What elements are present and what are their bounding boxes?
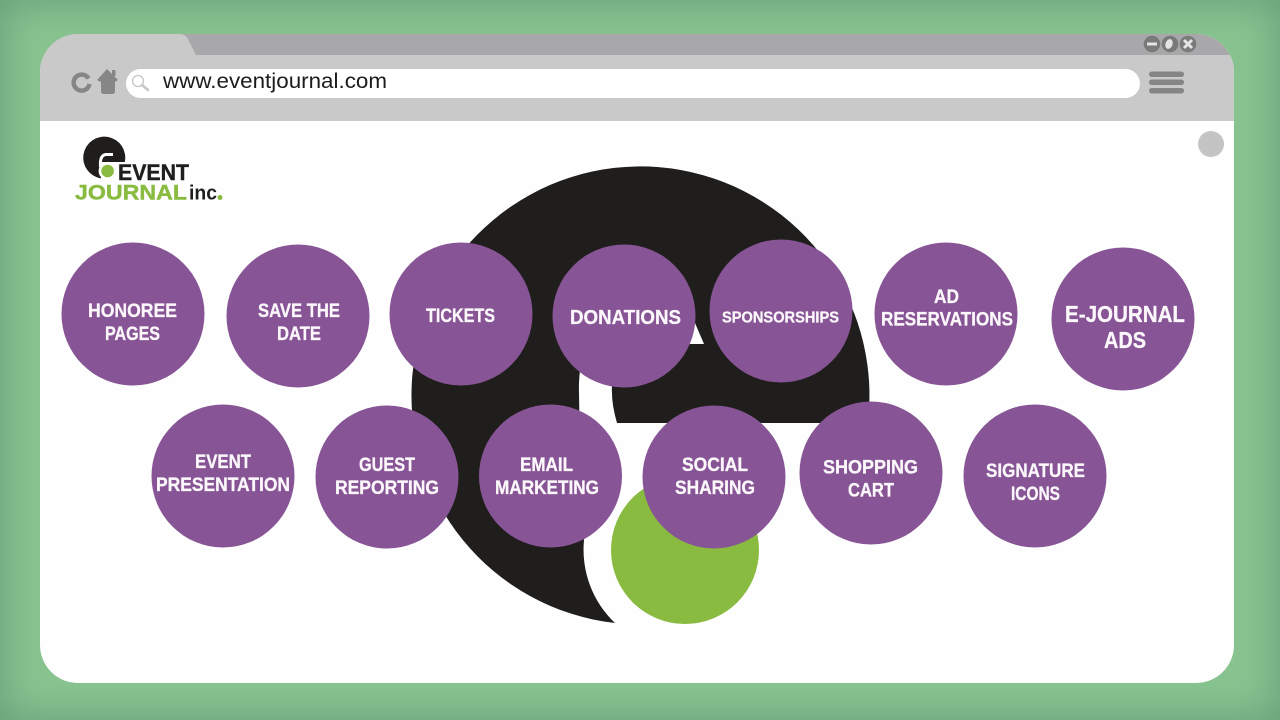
feature circle: sponsorships: SPONSORSHIPS: [722, 310, 839, 326]
logo mark: [83, 137, 125, 180]
feature circle: event presentation: [152, 404, 294, 548]
feature circle: ad reservations: RESERVATIONS: [881, 310, 1013, 330]
icon: menu: [1149, 72, 1184, 94]
address bar: [126, 69, 1140, 98]
feature circle: guest reporting: GUEST: [359, 455, 415, 476]
feature circle: signature icons: SIGNATURE: [986, 461, 1085, 482]
feature circle: signature icons: [964, 404, 1106, 548]
feature circle: e-journal ads: E-JOURNAL: [1065, 301, 1185, 327]
icon: search: [132, 76, 148, 90]
feature circle: signature icons: ICONS: [1011, 484, 1060, 505]
logo text: event: EVENT: [118, 160, 190, 185]
feature circle: shopping cart: SHOPPING: [823, 458, 918, 478]
feature circle: tickets: [390, 242, 532, 386]
icon: home: [97, 69, 118, 94]
feature circle: ad reservations: AD: [934, 287, 959, 308]
feature circle: social sharing: [642, 406, 786, 548]
feature circle: guest reporting: REPORTING: [335, 478, 439, 499]
feature circle: honoree pages: [62, 242, 204, 386]
feature circle: honoree pages: HONOREE: [88, 301, 177, 322]
feature circle: ad reservations: [874, 242, 1018, 386]
large green dot: [611, 476, 759, 624]
logo dot: [218, 195, 222, 200]
feature circle: event presentation: PRESENTATION: [156, 475, 290, 496]
feature circle: email marketing: MARKETING: [495, 478, 599, 499]
feature circle: save the date: DATE: [277, 324, 321, 345]
feature circle: shopping cart: [800, 402, 942, 544]
logo text: inc: inc: [189, 182, 217, 204]
feature circle: save the date: SAVE THE: [258, 301, 340, 322]
feature circle: email marketing: [479, 404, 622, 548]
feature circle: email marketing: EMAIL: [520, 455, 573, 476]
feature circle: social sharing: SHARING: [675, 478, 755, 499]
feature circle: shopping cart: CART: [848, 480, 894, 502]
large logo e shape: [411, 166, 870, 623]
feature circle: event presentation: EVENT: [195, 452, 251, 473]
icon: reload: [74, 75, 90, 91]
grey dot: [1198, 131, 1224, 157]
feature circle: sponsorships: [710, 240, 852, 382]
feature circle: e-journal ads: [1052, 248, 1194, 390]
logo: [75, 137, 222, 204]
feature circle: donations: [552, 244, 696, 388]
feature circle: social sharing: SOCIAL: [682, 455, 748, 476]
feature circle: e-journal ads: ADS: [1104, 327, 1146, 353]
feature circle: guest reporting: [316, 406, 458, 548]
feature circle: donations: DONATIONS: [570, 306, 681, 329]
feature circle: tickets: TICKETS: [426, 306, 495, 327]
url text: www.eventjournal.com: [162, 70, 387, 93]
feature circle: save the date: [226, 244, 370, 388]
logo text: journal: JOURNAL: [75, 180, 187, 204]
feature circle: honoree pages: PAGES: [105, 324, 160, 345]
window buttons: [1144, 36, 1196, 52]
